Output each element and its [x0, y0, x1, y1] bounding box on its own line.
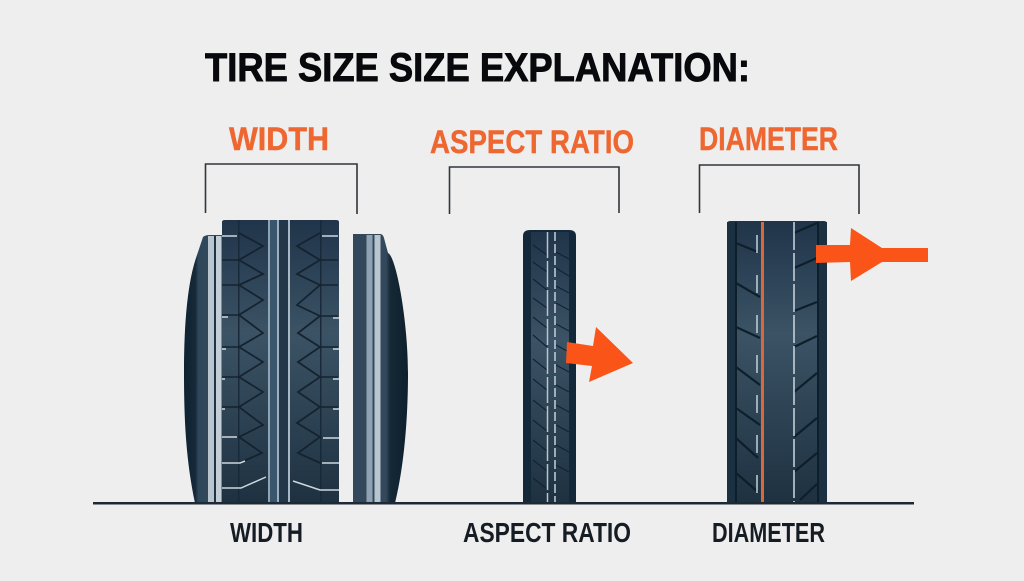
centre tread [222, 220, 339, 503]
title: TIRE SIZE SIZE EXPLANATION: [205, 46, 750, 90]
left shoulder [184, 235, 222, 503]
tire body [523, 230, 576, 503]
arrow: aspect ratio [566, 327, 633, 382]
tire: diameter [727, 221, 827, 503]
tread highlights [222, 236, 339, 490]
heading: width: WIDTH [229, 121, 329, 157]
orange centre line [761, 222, 764, 503]
bracket: aspect ratio [450, 167, 619, 214]
left tread chevrons [239, 233, 263, 463]
right shoulder [353, 234, 408, 503]
heading: aspect ratio: ASPECT RATIO [430, 124, 634, 160]
baseline [93, 502, 914, 504]
tire body [727, 221, 827, 503]
heading: diameter: DIAMETER [699, 121, 838, 157]
tread grooves [736, 223, 817, 500]
label: width: WIDTH [230, 517, 303, 548]
bracket: width [206, 164, 357, 214]
right tread chevrons [297, 233, 320, 463]
bracket: diameter [700, 165, 859, 214]
label: aspect ratio: ASPECT RATIO [463, 517, 631, 548]
arrow: diameter [816, 228, 928, 281]
tread cross grooves [222, 260, 338, 407]
tire: front view width [184, 220, 408, 503]
dashed centre lines [546, 232, 548, 503]
tire: aspect ratio [523, 230, 576, 503]
tread grooves [533, 245, 569, 489]
label: diameter: DIAMETER [712, 517, 825, 548]
dashed lines [756, 235, 758, 503]
